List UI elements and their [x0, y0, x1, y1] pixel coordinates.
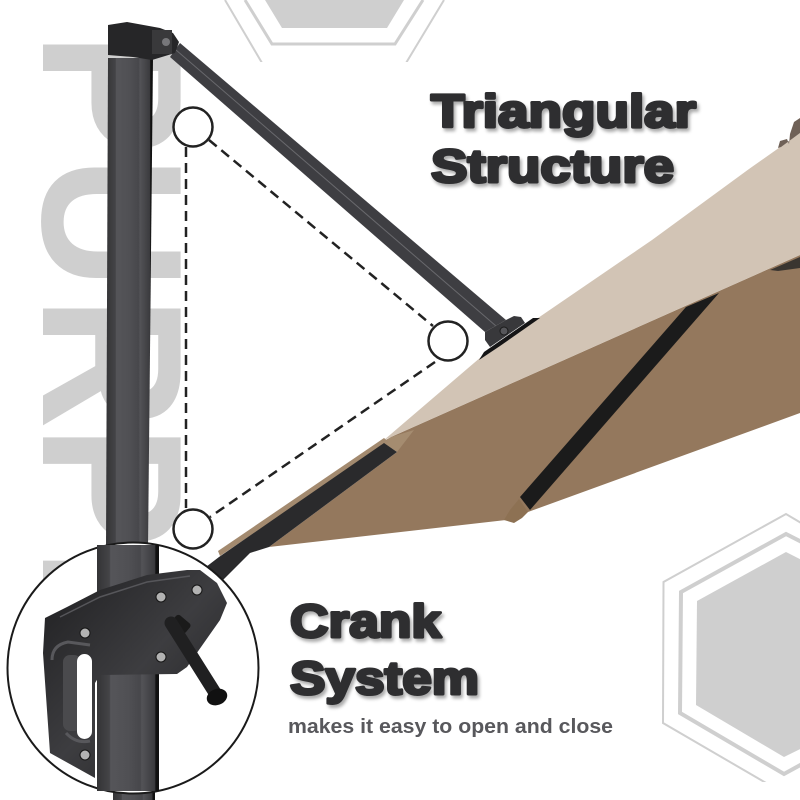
- bottom right hexagon decoration: [663, 514, 800, 794]
- canopy top panel: [384, 133, 800, 440]
- crank handle: [170, 614, 230, 708]
- pole head: [108, 22, 179, 60]
- housing bolts: [80, 585, 202, 760]
- triangle node bottom: [174, 510, 212, 548]
- umbrella canopy: [202, 118, 800, 580]
- heading: Crank System: System: [290, 652, 479, 704]
- heading: Crank System: Crank: [290, 595, 441, 647]
- pole below inset: [113, 790, 155, 800]
- brace bracket: [479, 318, 540, 360]
- inset pole: [97, 545, 159, 791]
- canopy finial: [778, 118, 800, 148]
- crank housing: [43, 570, 227, 778]
- heading: Triangular Structure: [431, 85, 696, 192]
- right rib: [770, 257, 800, 271]
- heading: Triangular Structure: Triangular: [431, 85, 696, 137]
- caption: makes it easy to open and close: [288, 715, 613, 738]
- triangle node top: [174, 108, 212, 146]
- heading: Crank System: [290, 595, 479, 704]
- triangle dashed outline: [186, 140, 435, 517]
- triangle node right: [428, 322, 468, 360]
- crank inset: [8, 542, 258, 794]
- canopy edge stripe: [218, 438, 389, 556]
- housing top highlight: [60, 576, 190, 617]
- main pole: [106, 58, 153, 548]
- upper brace arm: [170, 43, 540, 360]
- canopy underside: [269, 255, 800, 547]
- second rib: [520, 293, 719, 510]
- lower canopy arm: [202, 443, 397, 580]
- canopy corner fold: [382, 430, 414, 452]
- housing handle opening: [52, 642, 92, 742]
- top hexagon decoration: [225, 0, 444, 68]
- inset circle: [8, 542, 258, 794]
- rib end cap: [504, 499, 528, 523]
- background rotated word: PURPL: [0, 32, 224, 661]
- heading: Triangular Structure: Structure: [431, 140, 674, 192]
